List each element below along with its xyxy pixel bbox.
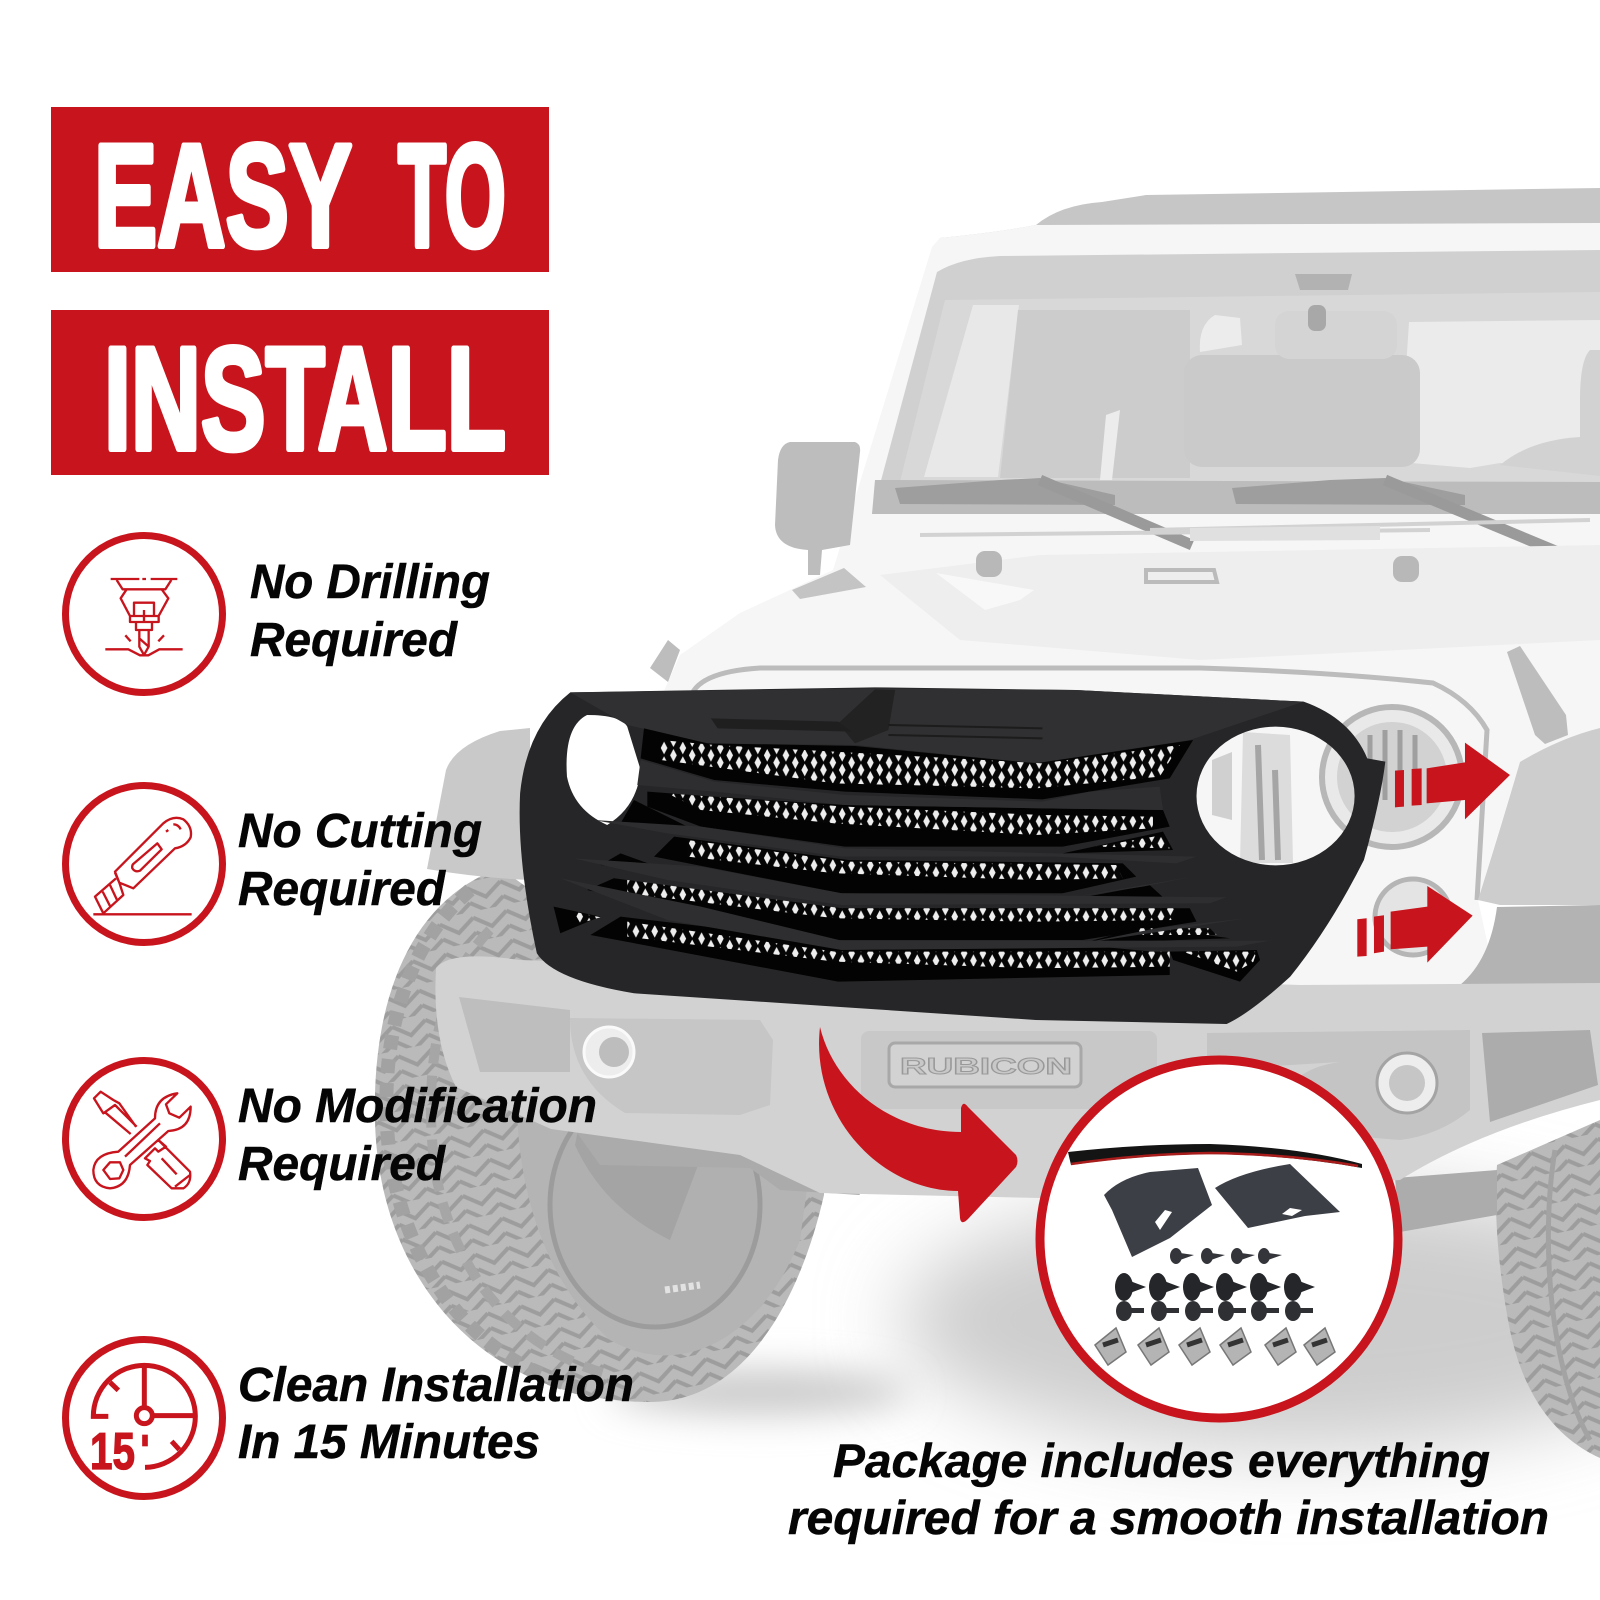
windshield bbox=[872, 250, 1600, 514]
feature text: no drilling: Required bbox=[250, 614, 459, 667]
headlight bbox=[1212, 707, 1462, 955]
latches bbox=[650, 640, 1568, 744]
icon: clock 15 bbox=[66, 1340, 222, 1496]
hood bbox=[792, 520, 1600, 660]
right fender bbox=[1478, 728, 1600, 905]
mesh panels bbox=[574, 740, 1257, 972]
rubicon plate: RUBICON bbox=[900, 1053, 1072, 1079]
left wheel bbox=[550, 1083, 760, 1327]
wipers bbox=[895, 478, 1565, 555]
push clips bbox=[1115, 1273, 1315, 1301]
grille surround line bbox=[690, 668, 1487, 900]
feature text: no drilling bbox=[250, 556, 490, 667]
icon: tools bbox=[66, 1060, 222, 1218]
title: install bbox=[51, 310, 549, 480]
icon: knife bbox=[66, 786, 222, 942]
left fender flare bbox=[427, 728, 530, 880]
right tire bbox=[1496, 1120, 1600, 1458]
red arrow: top bbox=[1395, 743, 1510, 819]
right recess bbox=[1482, 1030, 1598, 1122]
red arrow: lower bbox=[1357, 886, 1473, 963]
grille body bbox=[520, 687, 1385, 1024]
title: install: INSTALL bbox=[104, 317, 506, 480]
feature text: no cutting: No Cutting bbox=[238, 805, 482, 858]
ground shadow bbox=[610, 1190, 1600, 1450]
feature text: no drilling: No Drilling bbox=[250, 556, 490, 609]
slots bbox=[554, 728, 1260, 982]
parts circle bbox=[1040, 1060, 1398, 1418]
right fog housing bbox=[1207, 1030, 1470, 1140]
body bbox=[660, 223, 1600, 1000]
underbody bbox=[1395, 1170, 1497, 1232]
engine gap bbox=[1460, 905, 1600, 985]
clock label: 15 bbox=[90, 1422, 135, 1480]
feature text: no cutting: Required bbox=[238, 863, 447, 916]
feature text: no modification: Required bbox=[238, 1138, 447, 1191]
rivets bbox=[1116, 1301, 1313, 1321]
title: easy to: EASY bbox=[94, 114, 352, 277]
feature text: clean installation bbox=[238, 1359, 634, 1469]
weather strip bbox=[1068, 1144, 1362, 1168]
metal clips bbox=[1095, 1328, 1335, 1365]
grille bbox=[520, 687, 1385, 1024]
package caption bbox=[788, 1434, 1549, 1544]
feature text: no modification: No Modification bbox=[238, 1080, 597, 1133]
soft top bbox=[932, 188, 1600, 250]
louver bars bbox=[560, 760, 1270, 950]
feature text: no modification bbox=[238, 1080, 597, 1191]
package caption: required for a smooth installation bbox=[788, 1491, 1549, 1544]
feature text: clean installation: In 15 Minutes bbox=[238, 1416, 540, 1469]
package caption: Package includes everything bbox=[833, 1434, 1490, 1487]
title: easy to: TO bbox=[398, 114, 506, 277]
left tire bbox=[375, 868, 824, 1402]
jeep photo bbox=[375, 188, 1600, 1458]
top plate bbox=[570, 688, 1304, 763]
feature text: no cutting bbox=[238, 805, 482, 916]
screws bbox=[1170, 1248, 1282, 1264]
icon: drill bbox=[66, 536, 222, 692]
bracket panels bbox=[1104, 1164, 1340, 1257]
right fog lamp bbox=[1377, 1053, 1437, 1113]
mirror bbox=[775, 442, 860, 575]
feature text: clean installation: Clean Installation bbox=[238, 1359, 634, 1412]
rubicon plate bbox=[861, 1031, 1157, 1109]
curved red arrow bbox=[819, 1027, 1018, 1222]
left recess bbox=[459, 997, 570, 1072]
bumper bbox=[435, 956, 1600, 1198]
left fog lamp bbox=[584, 1027, 634, 1077]
